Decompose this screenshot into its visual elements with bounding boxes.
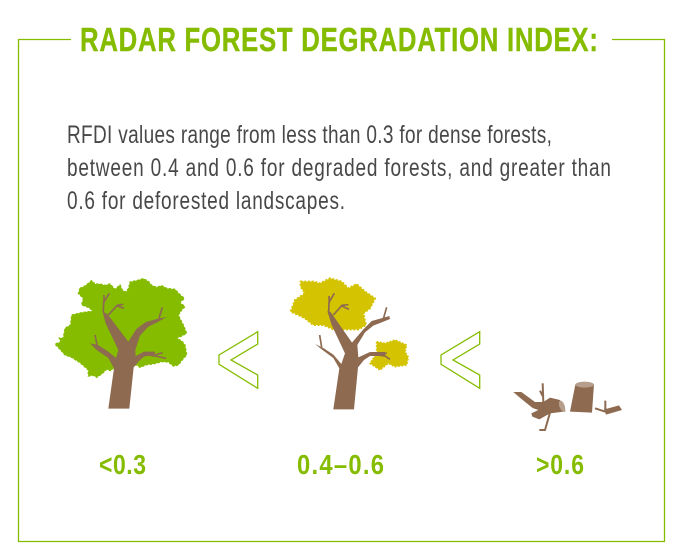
description text: between 0.4 and 0.6 for degraded forests, and greater than [67,153,611,182]
description text: 0.6 for deforested landscapes. [67,186,345,215]
icon: cut tree stump and log [513,382,622,430]
label: dense forest value: <0.3 [99,450,146,481]
description text: RFDI values range from less than 0.3 for dense forests, [67,120,552,149]
label: degraded forest value: 0.4–0.6 [297,448,384,480]
title: RADAR FOREST DEGRADATION INDEX: [80,22,598,59]
icon: chevron less-than 2 [441,332,480,388]
icon: degraded yellow tree [291,278,408,409]
description text [67,120,611,215]
label: deforested value: >0.6 [536,450,584,481]
icon: chevron less-than 1 [219,332,258,388]
icon: dense green tree [55,279,187,409]
